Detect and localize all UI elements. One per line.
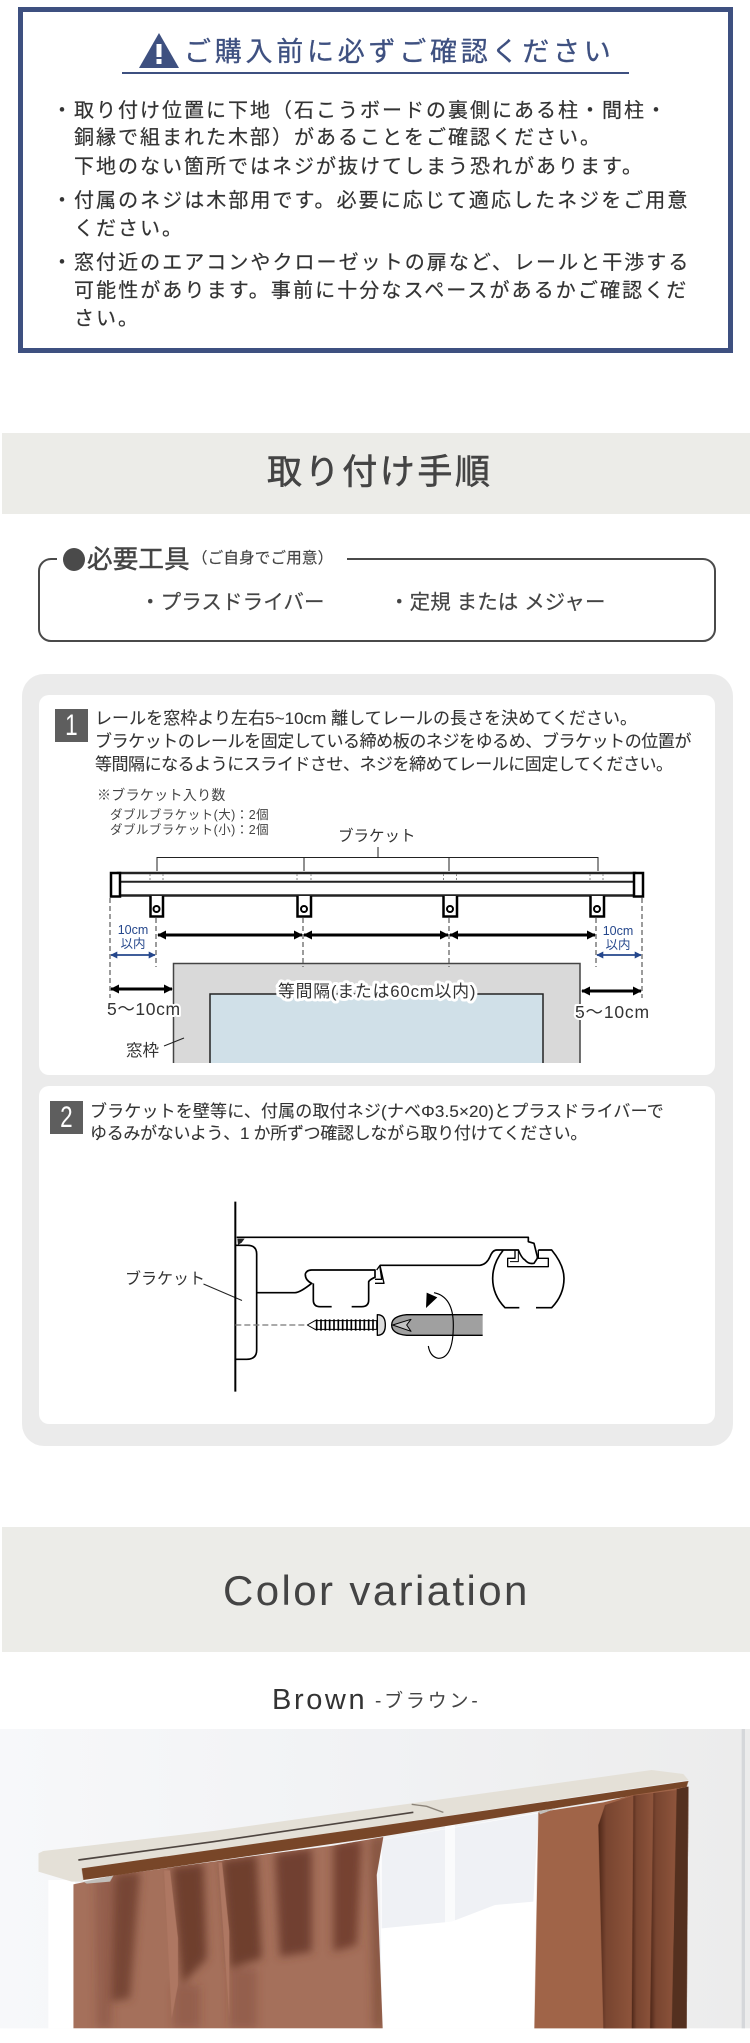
tools title: 必要工具 [87,546,190,574]
top plate and rail holder [237,1237,537,1265]
runner [493,1250,564,1308]
10cm labels [118,923,633,952]
photo: brown curtain on rail [2,1729,750,2028]
5 to 10cm arrows [111,989,641,991]
color name: brown: -ブラウン- [375,1691,480,1712]
step 2 number: 2 [60,1101,73,1134]
rotation arrow [428,1293,453,1358]
window frame leader [164,1038,184,1046]
rail [111,873,643,896]
window glass [210,994,543,1063]
10cm labels: 10cm [603,924,633,938]
notice text block: 銅縁で組まれた木部）があることをご確認ください。 [74,127,602,149]
panel: steps background [22,674,733,1446]
notice text block: ・ [52,100,74,122]
wall [0,1729,750,2028]
section heading: installation steps: 取り付け手順 [267,453,493,492]
step 1 instructions: 等間隔になるようにスライドさせ、ネジを締めてレールに固定してください。 [95,755,673,774]
sheer curtains [48,1812,540,2028]
tools heading [57,546,347,576]
notice text block: 下地のない箇所ではネジが抜けてしまう恐れがあります。 [74,156,644,178]
screw [307,1315,385,1335]
10cm labels: 10cm [118,923,148,937]
notice heading: ご購入前に必ずご確認ください [184,37,614,67]
step 1 instructions [95,709,692,774]
window frame label: 窓枠 [126,1041,159,1060]
window frame [174,964,580,1063]
left curtain panel [67,1835,387,2032]
bracket count note: ダブルブラケット(大)：2個 [110,808,269,822]
notice text block: ・ [52,190,74,212]
notice text block: 窓付近のエアコンやクローゼットの扉など、レールと干渉する [74,252,690,274]
color name: brown: Brown [272,1684,367,1716]
rail brown fascia [82,1781,688,1880]
notice text block: 付属のネジは木部用です。必要に応じて適応したネジをご用意 [74,190,689,212]
inner carrier [257,1270,375,1307]
wall brackets [150,896,604,916]
card: step 1 [39,695,715,1075]
diagram: rail layout [107,826,650,1063]
step 1 number: 1 [65,709,78,742]
notice text block: ください。 [74,218,184,240]
bracket count note: ダブルブラケット(小)：2個 [110,823,269,837]
back plate [235,1245,257,1359]
tools note: （ご自身でご用意） [192,550,333,567]
step 2 number [50,1101,83,1134]
section band: color variation [2,1527,750,1652]
notice text block [52,100,690,330]
bracket count note: ※ブラケット入り数 [97,787,226,803]
bullet dot [63,548,85,571]
bracket leader lines [157,847,598,871]
bracket label: ブラケット [338,826,416,845]
notice text block: 可能性があります。事前に十分なスペースがあるかご確認くだ [74,280,688,302]
diagram: bracket mounting [125,1202,565,1392]
wall [232,1202,238,1392]
guide dash [235,1323,307,1327]
dimension guides [110,898,642,998]
5 to 10cm labels: 5〜10cm [575,1002,650,1022]
5 to 10cm labels [107,999,650,1022]
equal spacing label: 等間隔(または60cm以内) [278,982,476,1001]
screwdriver [392,1315,483,1335]
right curtain panel [534,1787,688,2028]
panel: notice before purchase [18,7,733,353]
10cm labels: 以内 [120,937,146,951]
bracket count note [97,787,269,837]
color name: brown [272,1684,480,1716]
section heading: color variation: Color variation [223,1567,530,1614]
icon: warning triangle [139,33,179,68]
equal spacing arrows [158,934,595,936]
rail groove [78,1812,413,1860]
bracket leader [204,1284,242,1300]
curtain hooks [83,1804,587,1884]
10cm labels: 以内 [605,938,631,952]
left panel folds [95,1835,387,2028]
tool item: ruler or tape: ・定規 または メジャー [389,591,606,614]
panel: required tools [38,558,716,642]
step 1 instructions: レールを窓枠より左右5~10cm 離してレールの長さを決めてください。 [95,709,637,728]
step 2 instructions [90,1102,664,1143]
step 1 instructions: ブラケットのレールを固定している締め板のネジをゆるめ、ブラケットの位置が [95,732,691,751]
notice heading underline [122,72,629,74]
5 to 10cm labels: 5〜10cm [107,999,181,1019]
tool item: screwdriver: ・プラスドライバー [140,591,325,614]
right panel folds [598,1787,688,2028]
notice text block: さい。 [74,308,140,330]
step 1 number [55,709,88,742]
10cm blue arrows [111,954,641,956]
bracket label: ブラケット [125,1269,205,1288]
notice text block: ・ [52,252,74,274]
bracket drawing [235,1202,564,1392]
rail cream top [38,1770,688,1882]
step 2 instructions: ブラケットを壁等に、付属の取付ネジ(ナベΦ3.5×20)とプラスドライバーで [90,1102,664,1121]
card: step 2 [39,1086,715,1424]
section band: installation steps [2,433,750,514]
rail seam [412,1804,443,1812]
step 2 instructions: ゆるみがないよう、1 か所ずつ確認しながら取り付けてください。 [90,1124,587,1143]
notice text block: 取り付け位置に下地（石こうボードの裏側にある柱・間柱・ [74,100,668,122]
